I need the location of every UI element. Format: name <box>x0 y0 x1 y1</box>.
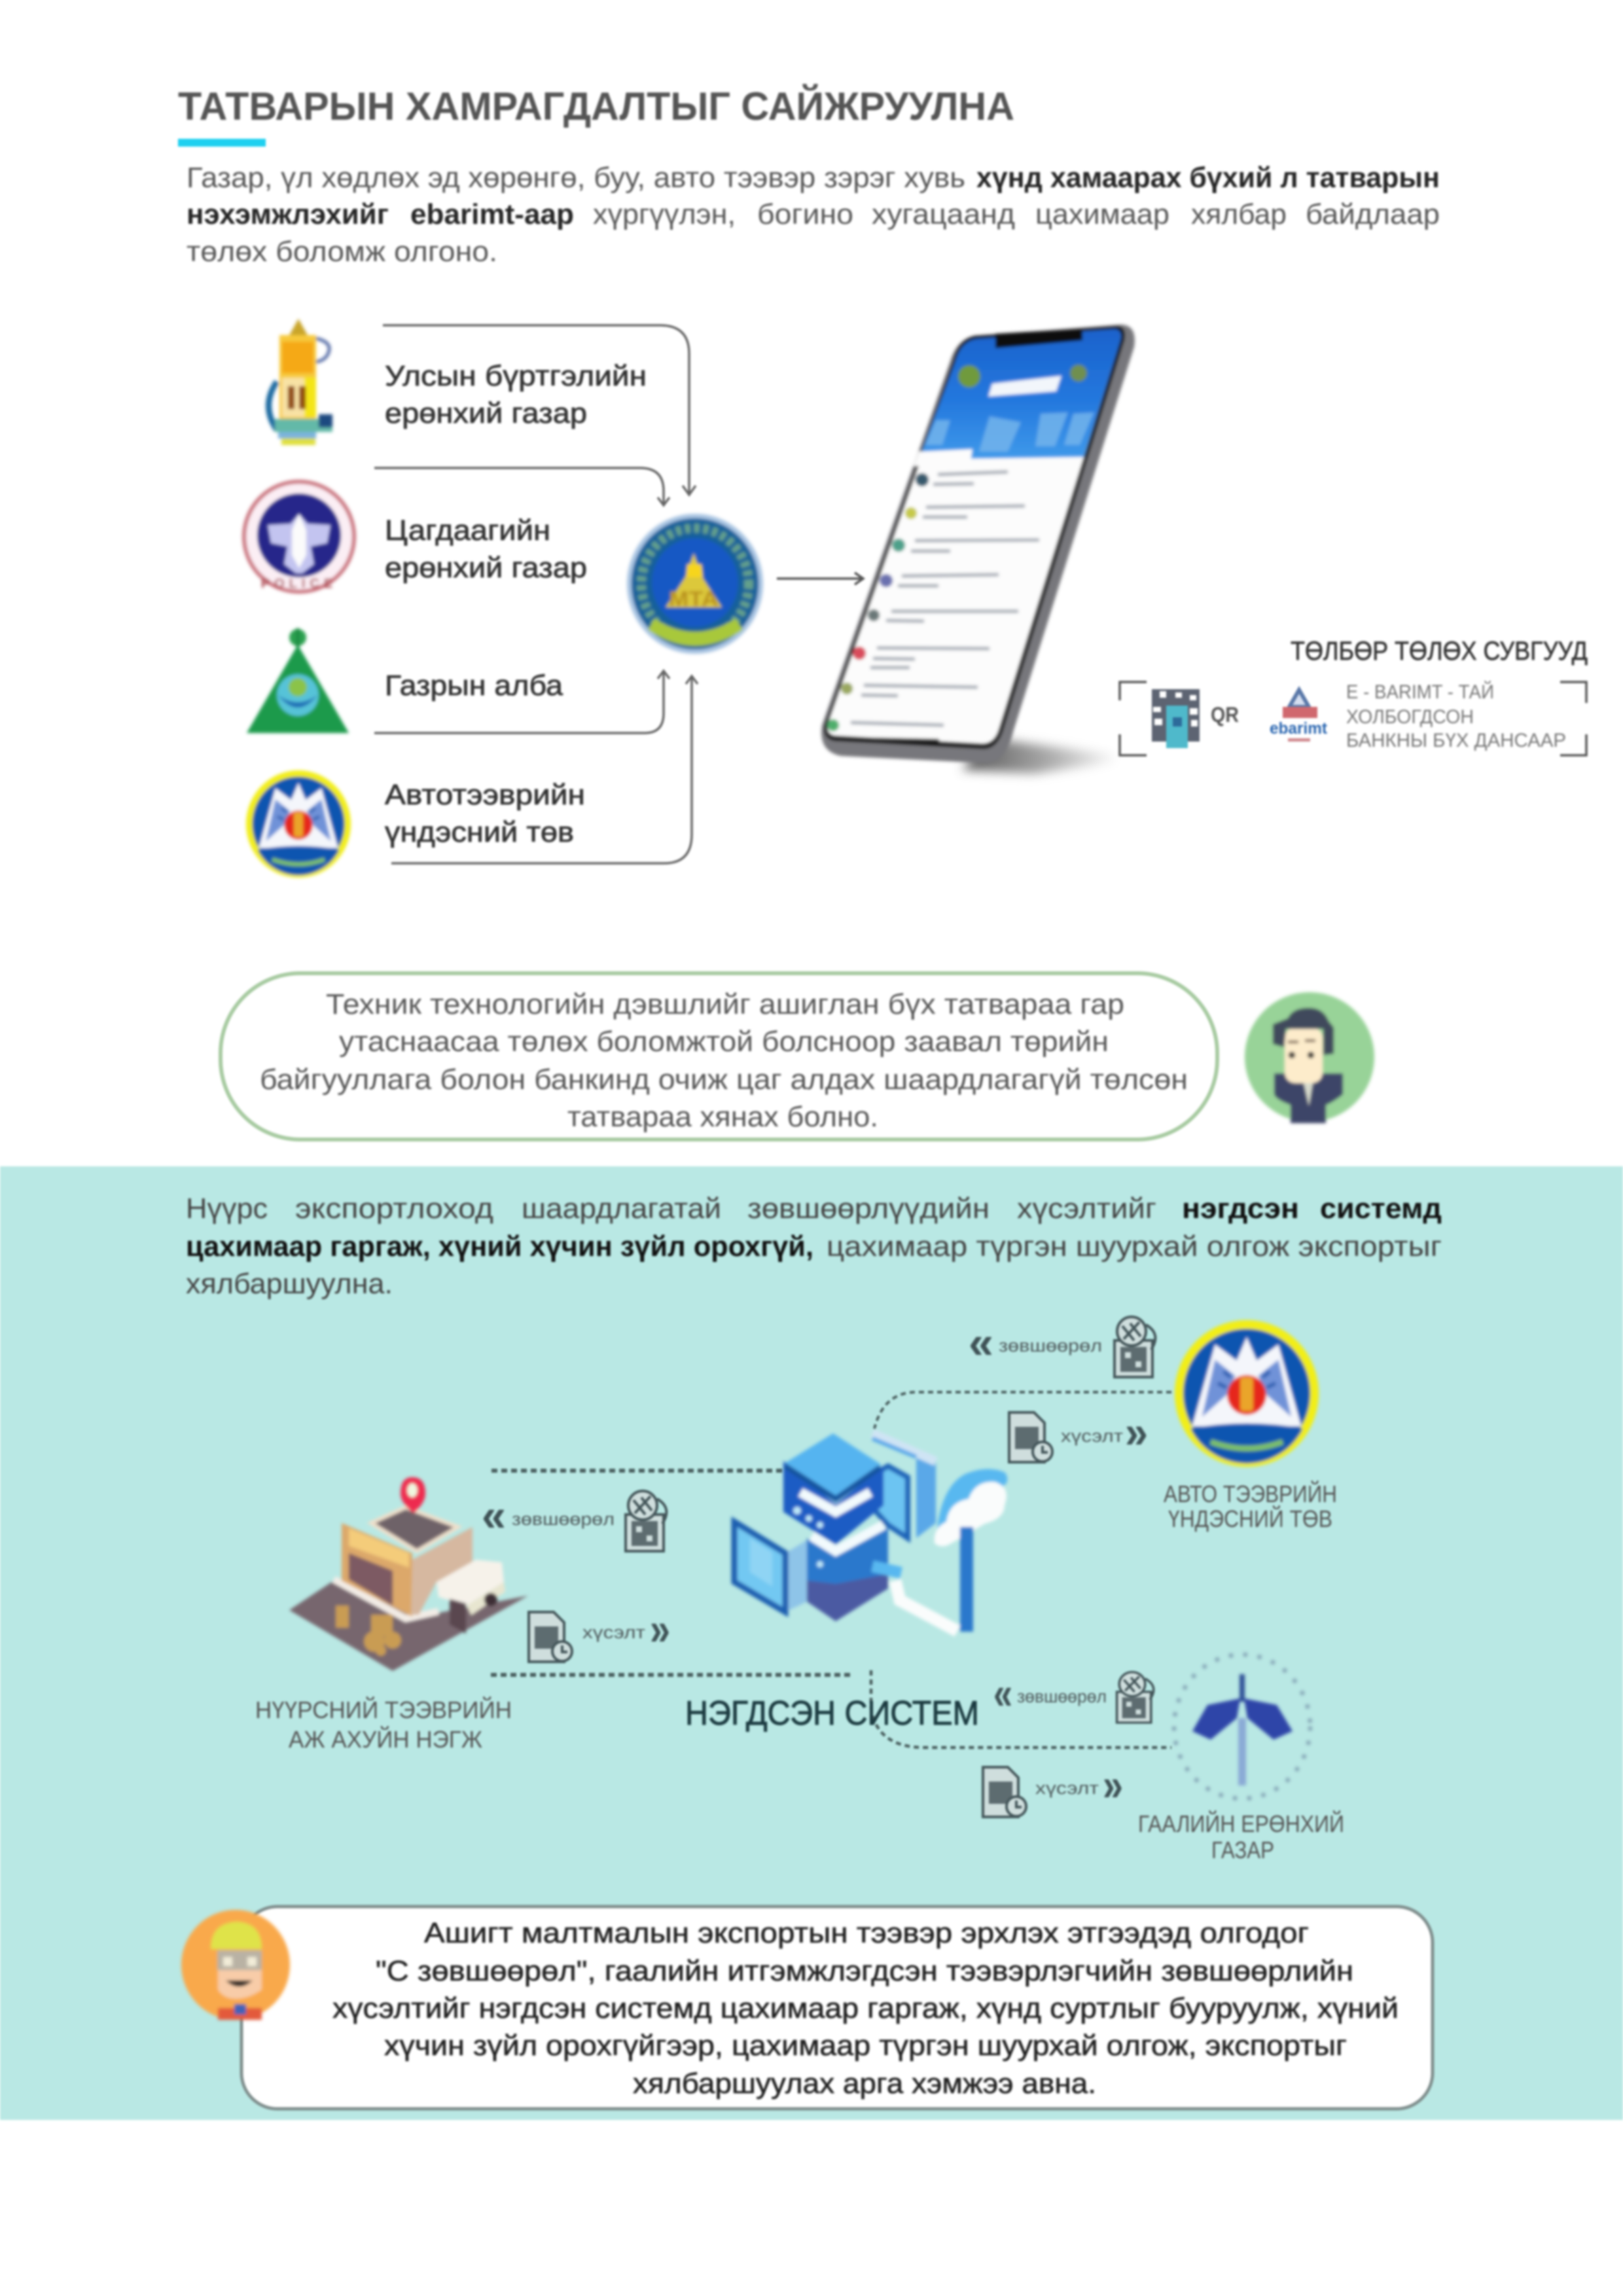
label: police: ерөнхий газар <box>385 552 587 584</box>
approval: from transport center: зөвшөөрөл <box>999 1336 1102 1355</box>
phone shadow <box>962 738 1119 774</box>
white chevron upper <box>800 1492 870 1512</box>
phone screen white <box>827 329 1121 744</box>
top cube <box>783 1461 883 1545</box>
roof <box>371 1507 458 1551</box>
request: to transport center: » <box>1125 1407 1148 1458</box>
payment option frame <box>1120 682 1586 755</box>
text block: export paragraph: Нүүрс <box>186 1193 268 1225</box>
label: customs: ГААЛИЙН ЕРӨНХИЙ <box>1138 1810 1344 1837</box>
label: transport center: үндэсний төв <box>385 816 574 848</box>
connector: coal company upper <box>491 1469 787 1473</box>
callout: technology: утаснаасаа төлөх боломжтой болсноор заавал төрийн <box>339 1026 1109 1058</box>
callout: mining export <box>241 1907 1433 2109</box>
text block: export paragraph: зөвшөөрлүүдийн <box>747 1193 990 1225</box>
text block: intro paragraph: нэхэмжлэхийг <box>187 198 389 230</box>
icon: ebarimt logo: ebarimt <box>1270 719 1328 738</box>
text block: export paragraph: экспортлоход <box>295 1193 493 1225</box>
label: coal company: НҮҮРСНИЙ ТЭЭВРИЙН <box>255 1696 512 1723</box>
approval: to coal company: зөвшөөрөл <box>512 1509 615 1529</box>
phone notch <box>995 329 1082 348</box>
phone rows <box>827 472 1039 731</box>
label: coal company <box>255 1696 512 1753</box>
approval: from customs <box>993 1668 1154 1723</box>
text block: intro paragraph <box>187 162 1440 268</box>
phone screen blue header <box>919 329 1121 459</box>
panel: coal export <box>0 1166 1623 2120</box>
arrow: transport center to tax authority <box>391 676 698 863</box>
text block: export paragraph: цахимаар түргэн шуурхай олгож экспортыг <box>827 1230 1442 1263</box>
icon: transport center logo <box>246 770 351 878</box>
server lights <box>793 1507 801 1515</box>
icon: man avatar <box>1245 992 1374 1123</box>
icon: ebarimt logo <box>1270 690 1328 742</box>
text block: intro paragraph: богино <box>757 198 853 230</box>
phone tab <box>914 449 972 466</box>
label: transport center <box>385 779 585 848</box>
text block: export paragraph: цахимаар гаргаж, хүний хүчин зүйл орохгүй, <box>186 1230 813 1263</box>
label: land agency: Газрын алба <box>385 670 563 702</box>
connector: system to transport center <box>874 1392 1171 1429</box>
callout: mining export: хүсэлтийг нэгдсэн системд цахимаар гаргаж, хүнд суртлыг бууруулж, хүний <box>332 1992 1399 2024</box>
phone home bar <box>874 739 939 740</box>
cloud <box>937 1469 1007 1532</box>
icon: QR code <box>1152 689 1200 748</box>
arrow: police to tax authority <box>374 468 669 505</box>
label: state registration: ерөнхий газар <box>385 397 587 429</box>
arrow: tax authority to phone <box>777 573 863 584</box>
text block: intro paragraph: хугацаанд <box>872 198 1015 230</box>
label: QR: QR <box>1211 703 1239 726</box>
approval: from transport center: « <box>969 1317 993 1368</box>
label: police: Цагдаагийн <box>385 514 550 547</box>
lower block <box>807 1527 888 1621</box>
heading: payment options: ТӨЛБӨР ТӨЛӨХ СУВГУУД <box>1291 637 1588 666</box>
request: from coal company <box>529 1604 670 1662</box>
approval: to coal company: « <box>482 1490 506 1541</box>
icon: tax authority logo <box>627 514 763 654</box>
text: bank payment <box>1346 681 1566 751</box>
arrow: registration to tax authority <box>383 325 696 495</box>
callout: mining export: Ашигт малтмалын экспортын тээвэр эрхлэх этгээдэд олгодог <box>424 1917 1309 1949</box>
callout: mining export: "С зөвшөөрөл", гаалийн итгэмжлэгдсэн тээвэрлэгчийн зөвшөөрлийн <box>376 1955 1353 1987</box>
text: bank payment: ХОЛБОГДСОН <box>1346 706 1474 728</box>
label: transport center: Автотээврийн <box>385 779 585 811</box>
phone small emblems <box>958 365 980 387</box>
icon: police logo: POLICE <box>261 577 337 591</box>
boxes <box>336 1605 401 1656</box>
callout: technology: татвараа хянах болно. <box>567 1101 878 1133</box>
rear monitor <box>870 1466 908 1538</box>
callout: technology <box>221 973 1217 1139</box>
callout: mining export: хялбаршуулах арга хэмжээ авна. <box>633 2068 1096 2100</box>
label: state registration <box>385 360 647 429</box>
building right wall <box>411 1527 473 1615</box>
label: transport center <box>1164 1480 1337 1532</box>
phone dark bezel <box>824 326 1125 749</box>
callout: technology: Техник технологийн дэвшлийг ашиглан бүх татвараа гар <box>326 988 1124 1020</box>
pipes <box>960 1527 973 1632</box>
text block: export paragraph <box>186 1193 1442 1300</box>
ground <box>289 1581 528 1671</box>
approval: from customs: « <box>993 1668 1012 1719</box>
text block: export paragraph: шаардлагатай <box>522 1193 721 1225</box>
connector: coal company lower <box>491 1673 850 1677</box>
text block: export paragraph: хүсэлтийг <box>1017 1193 1156 1225</box>
text block: intro paragraph: хүнд хамаарах бүхий л татварын <box>976 162 1440 194</box>
callout: technology: байгууллага болон банкинд очиж цаг алдах шаардлагагүй төлсөн <box>260 1064 1188 1096</box>
phone search bar <box>988 376 1061 397</box>
text block: intro paragraph: байдлаар <box>1306 198 1440 230</box>
text block: intro paragraph: цахимаар <box>1035 198 1169 230</box>
left pane <box>785 1540 807 1612</box>
request: to customs <box>983 1759 1123 1817</box>
approval: from customs: зөвшөөрөл <box>1017 1687 1107 1706</box>
request: to customs: » <box>1103 1759 1123 1810</box>
label: state registration: Улсын бүртгэлийн <box>385 360 647 392</box>
text: bank payment: БАНКНЫ БҮХ ДАНСААР <box>1346 730 1566 751</box>
text block: intro paragraph: хүргүүлэн, <box>593 198 736 230</box>
curb <box>334 1579 438 1619</box>
label: customs <box>1138 1810 1344 1863</box>
icon: miner avatar <box>181 1910 290 2020</box>
white chevron lower <box>812 1525 883 1551</box>
phone outer frame <box>821 325 1135 763</box>
approval: to coal company <box>482 1490 666 1551</box>
title accent bar <box>178 139 266 147</box>
connector: system to customs <box>871 1670 1171 1748</box>
phone mockup <box>821 325 1135 763</box>
text block: intro paragraph: ebarimt-аар <box>410 198 574 230</box>
heading: unified system: НЭГДСЭН СИСТЕМ <box>685 1695 979 1732</box>
label: transport center: ҮНДЭСНИЙ ТӨВ <box>1168 1505 1332 1532</box>
label: police <box>385 514 587 584</box>
text block: export paragraph: хялбаршуулна. <box>186 1268 393 1300</box>
text block: export paragraph: нэгдсэн <box>1182 1193 1299 1225</box>
icon: customs logo <box>1174 1655 1310 1799</box>
icon: coal company warehouse <box>289 1477 528 1671</box>
request: to customs: хүсэлт <box>1035 1778 1099 1798</box>
request: from coal company: » <box>650 1604 670 1655</box>
approval: from transport center <box>969 1317 1155 1377</box>
building left wall <box>342 1523 412 1617</box>
icon: unified system server <box>734 1433 1007 1632</box>
text block: intro paragraph: хялбар <box>1191 198 1287 230</box>
text: bank payment: E - BARIMT - ТАЙ <box>1346 681 1494 703</box>
icon: transport center logo large <box>1175 1320 1319 1467</box>
request: to transport center: хүсэлт <box>1061 1426 1123 1446</box>
label: coal company: АЖ АХУЙН НЭГЖ <box>289 1725 482 1753</box>
callout: mining export: хүчин зүйл орохгүйгээр, цахимаар түргэн шуурхай олгож, экспортыг <box>384 2030 1347 2062</box>
location pin <box>401 1477 425 1513</box>
label: transport center: АВТО ТЭЭВРИЙН <box>1164 1480 1337 1507</box>
label: customs: ГАЗАР <box>1211 1837 1274 1863</box>
icon: state registration logo <box>268 319 332 445</box>
arrow: land agency to tax authority <box>374 671 669 733</box>
text block: export paragraph: системд <box>1320 1193 1442 1225</box>
request: to transport center <box>1009 1407 1148 1462</box>
title: ТАТВАРЫН ХАМРАГДАЛТЫГ САЙЖРУУЛНА <box>178 84 1014 128</box>
phone header building shapes <box>925 412 1094 452</box>
text block: intro paragraph: төлөх боломж олгоно. <box>187 236 497 268</box>
icon: police logo <box>244 482 354 592</box>
truck <box>437 1560 504 1605</box>
rear strip <box>916 1458 936 1538</box>
text block: intro paragraph: Газар, үл хөдлөх эд хөрөнгө, буу, авто тээвэр зэрэг хувь <box>187 162 965 194</box>
icon: land agency logo <box>247 628 349 733</box>
icon: tax authority logo: MTA <box>669 587 719 611</box>
request: from coal company: хүсэлт <box>582 1623 645 1642</box>
